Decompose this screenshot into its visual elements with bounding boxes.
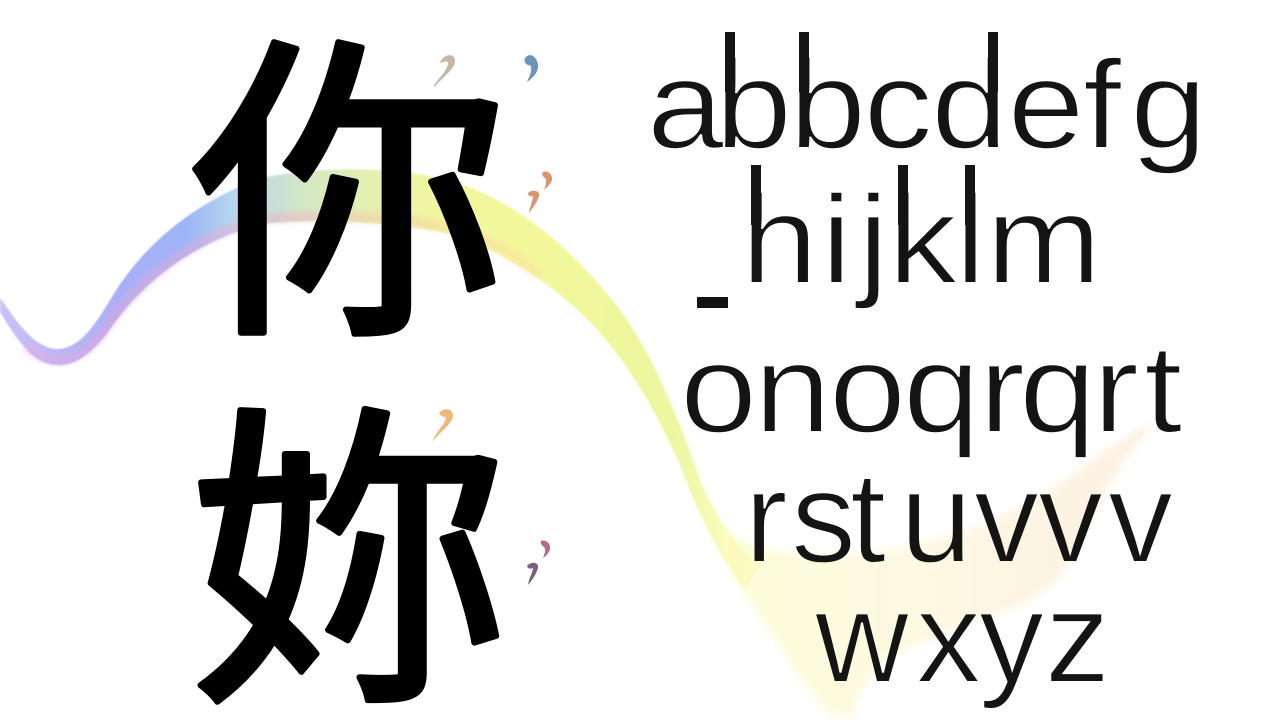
alphabet line 3: onoqrqrt: [680, 319, 1183, 460]
character: ni: 你: [190, 21, 508, 376]
accent mark: blue hook: [524, 55, 538, 82]
ribbon pale tail: [690, 422, 1155, 720]
small accent marks: [432, 55, 552, 585]
alphabet line 1: abbcdefg: [647, 35, 1207, 176]
title: chinese characters: [190, 21, 508, 720]
alphabet line 4: rstuvvv: [744, 444, 1173, 590]
accent mark: orange double hook: [528, 172, 552, 213]
accent mark: peach hook: [432, 409, 453, 442]
accent mark: pink double hook: [527, 541, 550, 585]
ribbon warm lower edge: [26, 217, 540, 360]
underscore mark: [697, 297, 728, 308]
ribbon main band: [0, 169, 760, 590]
alphabet line 2: hijklm: [741, 170, 1101, 311]
ascender stems: [725, 32, 998, 225]
rainbow ribbon: [0, 169, 1155, 720]
alphabet text block: [647, 32, 1207, 710]
accent mark: grey hook: [434, 56, 454, 86]
alphabet line 5: wxyz: [814, 564, 1110, 710]
